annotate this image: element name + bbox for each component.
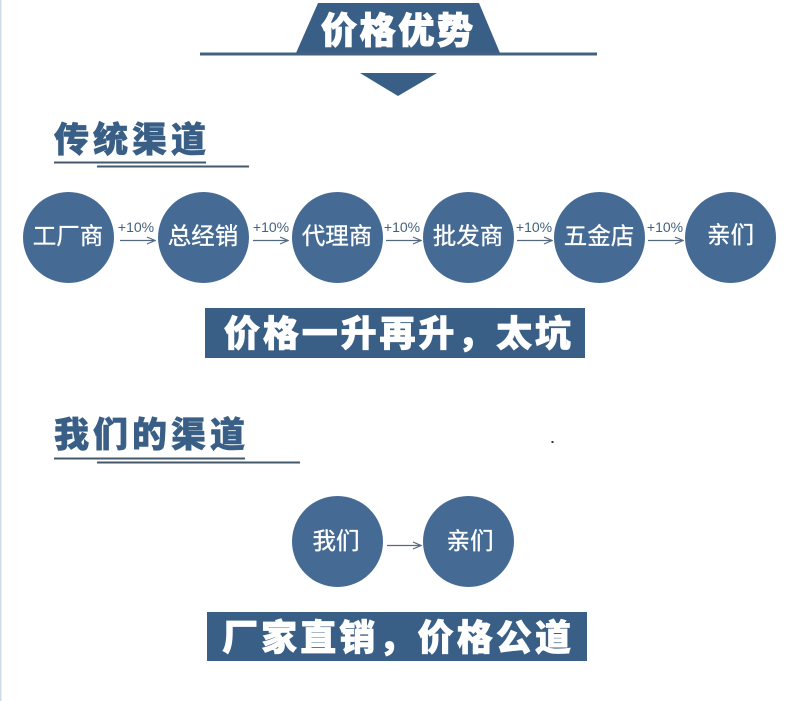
markup arrow 2: +10%: [253, 219, 289, 235]
callout: price keeps rising: 价格一升再升，太坑: [224, 313, 571, 354]
node: wholesaler: [423, 192, 514, 283]
flow: our channel: [292, 496, 514, 587]
node: distributor: [158, 192, 249, 283]
markup arrow 5: +10%: [647, 219, 683, 235]
markup arrow 1: +10%: [118, 219, 154, 235]
heading: traditional channel: 传统渠道: [54, 120, 206, 160]
node: us: [292, 496, 383, 587]
speck: [552, 441, 554, 443]
node: agent: [292, 192, 383, 283]
node: wholesaler: 批发商: [433, 223, 503, 249]
node: distributor: 总经销: [168, 223, 238, 249]
callout: factory direct: 厂家直销，价格公道: [222, 617, 571, 658]
markup arrow 3: +10%: [384, 219, 420, 235]
markup arrow 4: +10%: [516, 219, 552, 235]
direct arrow: [387, 544, 421, 546]
node: customer: 亲们: [707, 222, 754, 248]
node: factory: 工厂商: [33, 223, 103, 249]
title banner: [200, 3, 597, 56]
node: customer: [423, 496, 514, 587]
node: customer: 亲们: [446, 528, 494, 554]
heading: our channel: 我们的渠道: [54, 416, 245, 455]
node: factory: [23, 192, 114, 283]
title banner: 价格优势: [321, 10, 473, 51]
node: customer: [685, 192, 776, 283]
node: hardware store: 五金店: [564, 223, 634, 249]
node: hardware store: [554, 192, 645, 283]
down arrow: [360, 73, 437, 96]
node: us: 我们: [312, 528, 360, 554]
flow: traditional channel: [23, 192, 776, 283]
node: agent: 代理商: [302, 223, 372, 249]
